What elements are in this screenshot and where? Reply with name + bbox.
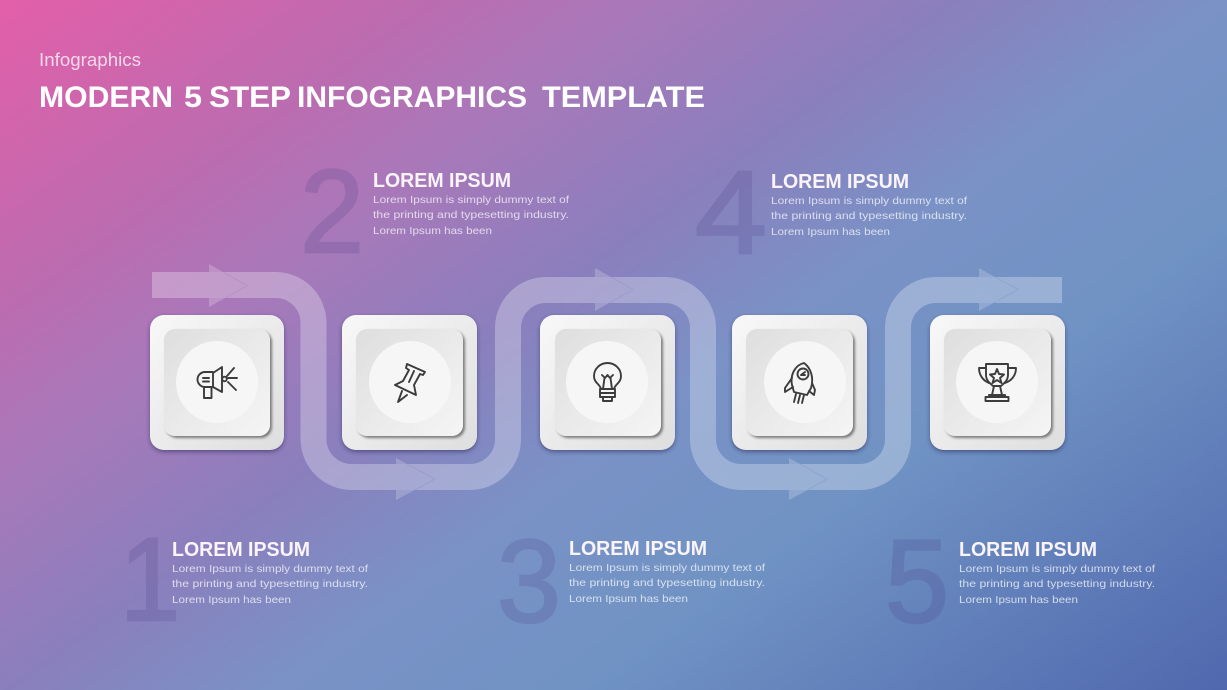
number 4: 4 (695, 147, 767, 279)
body 4: Lorem Ipsum is simply dummy text of (771, 195, 967, 207)
title: MODERN (39, 81, 173, 114)
arrowhead 4 (789, 458, 827, 500)
body 1: the printing and typesetting industry. (172, 578, 368, 590)
step 5 text (885, 516, 1155, 648)
body 2 (373, 194, 569, 237)
icon: push pin (395, 364, 425, 402)
body 2: Lorem Ipsum has been (373, 225, 492, 237)
body 5: the printing and typesetting industry. (959, 578, 1155, 590)
subtitle: Infographics (39, 50, 141, 70)
heading 1: LOREM IPSUM (172, 539, 310, 561)
icon: rocket (785, 363, 815, 403)
card 4 (732, 315, 867, 450)
card 5 (930, 315, 1065, 450)
body 5: Lorem Ipsum is simply dummy text of (959, 563, 1155, 575)
icon: megaphone (198, 367, 237, 398)
step 3 text (497, 516, 765, 648)
title: 5 (184, 81, 202, 114)
arrowhead 1 (209, 264, 247, 307)
card 1 (150, 315, 284, 450)
step 2 text (300, 146, 569, 278)
body 3 (569, 562, 765, 605)
step 1 text (120, 514, 368, 646)
body 1 (172, 563, 368, 606)
heading 5: LOREM IPSUM (959, 539, 1097, 561)
body 2: Lorem Ipsum is simply dummy text of (373, 194, 569, 206)
title: STEP (209, 81, 291, 114)
arrowhead 2 (396, 458, 435, 500)
body 3: the printing and typesetting industry. (569, 577, 765, 589)
body 5: Lorem Ipsum has been (959, 594, 1078, 606)
card 2 (342, 315, 477, 450)
heading 2: LOREM IPSUM (373, 170, 511, 192)
card 3 (540, 315, 675, 450)
body 1: Lorem Ipsum is simply dummy text of (172, 563, 368, 575)
icon: trophy (979, 364, 1016, 401)
ribbon (152, 285, 1062, 477)
heading 3: LOREM IPSUM (569, 538, 707, 560)
icon: light bulb (594, 363, 621, 401)
ribbon arrow path (152, 264, 1062, 500)
heading 4: LOREM IPSUM (771, 171, 909, 193)
body 4 (771, 195, 967, 238)
body 4: the printing and typesetting industry. (771, 210, 967, 222)
step 4 text (695, 147, 967, 279)
arrowhead 3 (595, 268, 633, 311)
body 3: Lorem Ipsum is simply dummy text of (569, 562, 765, 574)
title: TEMPLATE (542, 81, 705, 114)
number 1: 1 (120, 514, 180, 646)
arrowhead 5 (979, 268, 1018, 311)
number 5: 5 (885, 516, 949, 648)
body 2: the printing and typesetting industry. (373, 209, 569, 221)
body 5 (959, 563, 1155, 606)
body 1: Lorem Ipsum has been (172, 594, 291, 606)
body 3: Lorem Ipsum has been (569, 593, 688, 605)
title (39, 81, 705, 114)
number 3: 3 (497, 516, 561, 648)
title: INFOGRAPHICS (297, 81, 527, 114)
number 2: 2 (300, 146, 364, 278)
body 4: Lorem Ipsum has been (771, 226, 890, 238)
